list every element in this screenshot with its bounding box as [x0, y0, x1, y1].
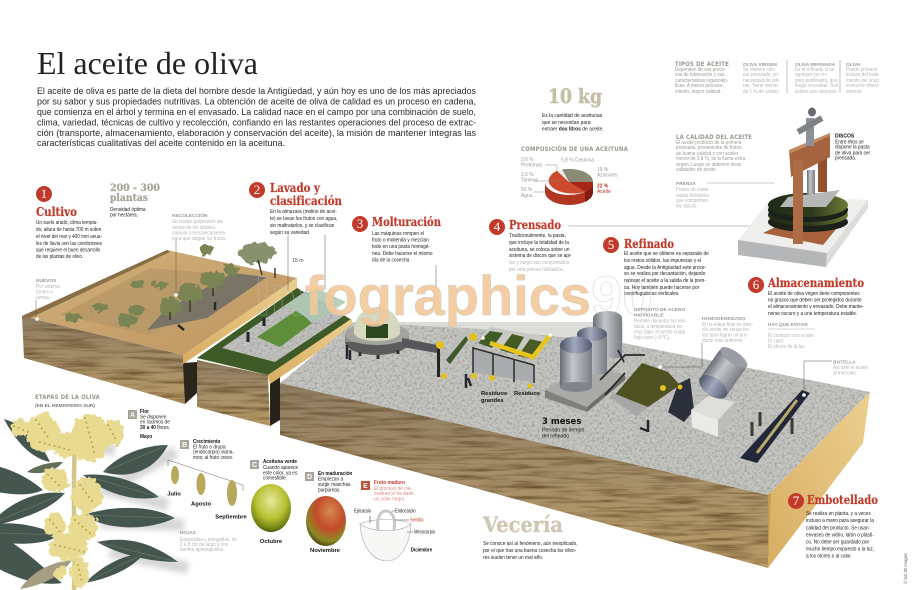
stage D: en maduración: D: [307, 474, 312, 481]
note: hay que evitar: HAY QUE EVITAR: [768, 322, 808, 328]
note: discos: dispone la pasta: [835, 144, 870, 151]
stage B: crecimiento: mos; al fruto crece.: [193, 455, 233, 461]
step 4: Prensado: Tradicionalmente, la pasta,: [509, 233, 566, 239]
panel: tipos de aceite: agregan (sin in-: [795, 72, 827, 78]
leaves: [0, 419, 178, 589]
stage C: aceituna verde: comestible.: [263, 475, 287, 482]
note: prensa: [676, 181, 775, 210]
chart: olive composition pie: Taninos: [521, 177, 538, 184]
stage B: crecimiento: Crecimiento: [193, 439, 221, 445]
panel: la calidad del aceite: calidades de aceite.: [676, 167, 717, 173]
step 4: Prensado: que incluye la totalidad de la: [509, 240, 569, 246]
panel: tipos de aceite: Dependen de sus proce-: [675, 67, 726, 73]
step 1: Cultivo: 1: [41, 186, 47, 201]
step 3: Molturación: [352, 214, 441, 264]
label: residuos: Residuos: [481, 391, 507, 397]
stage E: fruto maduro: El proceso de cal-: [374, 486, 412, 492]
step 2: Lavado y clasificación: [249, 180, 342, 236]
callout: 3 meses: Período de tiempo: [542, 428, 585, 434]
icon: steel tanks: [545, 311, 625, 412]
panel: tipos de aceite: miento, mayor calidad.: [675, 89, 722, 95]
stage C: aceituna verde: [250, 459, 298, 545]
panel: la calidad del aceite: El aceite producto de la primera: [676, 140, 742, 146]
step 3: Molturación: 3: [357, 216, 363, 231]
stage D: en maduración: En maduración: [318, 471, 352, 477]
step 5: Refinado: centrifugadoras verticales.: [624, 291, 679, 297]
icon: olive cross-section: [360, 511, 413, 561]
note: botella: BOTELLA: [833, 360, 856, 366]
stage E: fruto maduro: maduro lo ha dado: [374, 491, 414, 497]
chart: olive composition pie: COMPOSICIÓN DE UNA ACEITUNA: [521, 144, 628, 153]
step 5: Refinado: 5: [608, 237, 614, 252]
stage A: flor: Mayo: [140, 434, 153, 440]
chart: olive composition pie: Azúcares: [597, 172, 618, 179]
step 5: Refinado: El aceite que se obtiene es separado de: [624, 251, 709, 257]
label: residuos: [481, 391, 540, 404]
intro paragraph: por su sabor y sus propiedades nutritivas. La obtención de aceite de oliva de calidad es un proceso en cadena,: [37, 96, 476, 106]
panel: la calidad del aceite: prensada, proveniente de frutos: [676, 145, 742, 151]
title: El aceite de oliva: [37, 45, 258, 81]
stage D: en maduración: purpúreas.: [318, 487, 341, 494]
chart: olive composition pie: Aceite: [597, 189, 611, 195]
note: nuevos: brotes o: [36, 289, 53, 296]
step 5: Refinado: reposar el aceite a la salida de la pren-: [624, 278, 706, 284]
icon: wooden frame and screw: [789, 108, 830, 244]
note: hojas: 3 a 8 cm de largo y con: [180, 542, 228, 548]
panel: tipos de aceite: amente.: [846, 89, 863, 95]
step 5: Refinado: Refinado: [624, 236, 674, 251]
chart: olive composition pie: 3,6 %: [521, 172, 534, 178]
callout: Vecería: res suelen tener un mal año.: [483, 555, 543, 561]
note: depósito de acero: muy baja: el aceite cuaja: [634, 329, 685, 336]
step 7: Embotellado: Se realiza en planta, y a veces: [806, 511, 871, 517]
panel: la calidad del aceite: [676, 134, 752, 173]
intro paragraph: características cualitativas del aceite contenido en la aceituna.: [37, 137, 285, 148]
stat: 200-300 plantas: por hectárea.: [110, 212, 138, 219]
callout: 3 meses: del refinado: [542, 434, 569, 440]
note: homogeneizado: ducto más uniforme.: [702, 338, 744, 344]
heading: etapas de la oliva: (EN EL HEMISFERIO SUR): [35, 403, 95, 409]
panel: la calidad del aceite: menor de 0,8 %, se lo llama extra: [676, 156, 745, 162]
stage C: aceituna verde: Aceituna verde: [263, 459, 297, 465]
step 1: Cultivo: Un suelo arado, clima templa-: [36, 220, 98, 226]
step 2: Lavado y clasificación: 2: [254, 182, 260, 197]
step 3: Molturación: nea. Debe hacerse el mismo: [372, 251, 433, 257]
panel: tipos de aceite: OLIVA REFINADA: [795, 62, 836, 68]
stat: 200-300 plantas: plantas: [110, 193, 148, 204]
panel: tipos de aceite: nar. Tiene menos: [743, 83, 779, 89]
stage B: crecimiento: El fruto o drupa: [193, 444, 226, 451]
step 7: Embotellado: incluso a mano para asegurar la: [806, 518, 874, 524]
panel: tipos de aceite: por prensado, sin: [743, 72, 779, 78]
note: hay que evitar: El calor.: [768, 338, 785, 345]
step 2: Lavado y clasificación: te) se lavan los frutos con agua,: [270, 216, 337, 222]
panel: tipos de aceite: gerir purificado), que: [795, 78, 838, 84]
step 2: Lavado y clasificación: Lavado y: [270, 180, 321, 195]
note: hay que evitar: [768, 322, 815, 350]
intro paragraph: que comienza en el árbol y termina en el envasado. La calidad nace en el campo por una combinación de suelo,: [37, 106, 476, 117]
step 6: Almacenamiento: no grasos que deben ser protegidos durante: [768, 297, 862, 304]
step 7: Embotellado: co. No debe ser guardado por: [806, 539, 869, 546]
step 3: Molturación: Las máquinas rompen el: [372, 231, 424, 237]
panel: tipos de aceite: Se obtiene sólo: [743, 67, 775, 73]
step 5: Refinado: agua. Desde la Antigüedad este proce-: [624, 265, 706, 271]
stat: 10 kg: [542, 84, 604, 133]
note: recolección: RECOLECCIÓN: [172, 211, 208, 219]
stat: 200-300 plantas: [110, 183, 160, 219]
step 7: Embotellado: [788, 492, 878, 560]
step 1: Cultivo: que requiere el buen desarrollo: [36, 247, 100, 254]
intro paragraph: clima, variedad, técnicas de cultivo y recolección, confiando en las restantes operaciones del proceso de extrac-: [37, 116, 476, 128]
note: recolección: [172, 211, 227, 242]
step 3: Molturación: día de la cosecha.: [372, 257, 411, 264]
note: depósito de acero: INOXIDABLE: [634, 312, 664, 318]
note: depósito de acero: duos, a temperatura no: [634, 324, 682, 330]
note: homogeneizado: [702, 316, 753, 344]
note: recolección: manual o mecánicamente,: [172, 230, 226, 237]
stage B: crecimiento: B: [182, 442, 187, 449]
icon: workers: [248, 318, 264, 342]
stat: 200-300 plantas: 200 - 300: [110, 183, 160, 194]
note: homogeneizado: cla aceite de varias tor-: [702, 327, 750, 333]
step 1: Cultivo: [36, 186, 102, 260]
note: homogeneizado: HOMOGENEIZADO: [702, 316, 746, 322]
stage D: en maduración: Noviembre: [310, 548, 341, 554]
stage E: fruto maduro: Mesocarpio: [414, 529, 436, 535]
panel: tipos de aceite: características organolép-: [675, 78, 729, 84]
note: nuevos: NUEVOS: [36, 278, 57, 284]
note: depósito de acero: [634, 305, 687, 341]
step 1: Cultivo: les de lluvia son las condiciones: [36, 241, 102, 247]
panel: tipos de aceite: luego necesitan. Son: [795, 83, 838, 89]
icon: filter tray and tilted tank: [600, 343, 750, 437]
heading: etapas de la oliva: [35, 394, 100, 409]
chart: olive composition pie: Agua: [521, 193, 533, 199]
step 7: Embotellado: calidad del producto. Se usan: [806, 525, 869, 532]
panel: washing block 2: [197, 288, 355, 426]
panel: tipos de aceite: Es el refinado si se: [795, 67, 834, 73]
step 1: Cultivo: do, altura de hasta 700 m sobre: [36, 227, 102, 233]
note: depósito de acero: DEPÓSITO DE ACERO: [634, 305, 685, 313]
icon: yellow pipes and vats: [466, 327, 552, 388]
note: homogeneizado: En la etapa final se mez-: [702, 322, 753, 328]
stage A: flor: Flor: [140, 409, 149, 415]
step 1: Cultivo: Cultivo: [36, 204, 77, 219]
stat: 10 kg: 10 kg: [548, 84, 602, 108]
note: prensa: PRENSA: [676, 181, 697, 187]
stage C: aceituna verde: C: [252, 462, 257, 469]
label: residuos: grandes: [481, 398, 504, 404]
connector lines: 15 m: [292, 258, 304, 264]
flowers: [11, 414, 124, 587]
note: depósito de acero: bajo cero (−5 ºC).: [634, 335, 670, 341]
step 3: Molturación: Molturación: [372, 214, 441, 229]
panel: la calidad del aceite: de buena calidad y con acidez: [676, 151, 739, 157]
note: hay que evitar: El efecto de la luz.: [768, 344, 806, 350]
note: recolección: para que caigan los frutos.: [172, 236, 227, 242]
chart: olive composition pie: 3,6 %: [521, 157, 534, 163]
stage C: aceituna verde: este color, ya es: [263, 470, 298, 477]
icon: decanter ramp: [436, 328, 477, 379]
icon: stacked discs: [768, 190, 848, 232]
panel: tipos de aceite: ácidos sus menores.: [795, 89, 838, 95]
panel: tipos de aceite: sos de fabricación y sus: [675, 72, 725, 78]
intro paragraph: El aceite de oliva es parte de la dieta del hombre desde la Antigüedad, y aún hoy es uno de los más apreciados: [37, 85, 476, 96]
note: hojas: bordes aprietaguidos.: [180, 547, 225, 553]
step 6: Almacenamiento: Almacenamiento: [767, 275, 864, 290]
stage C: aceituna verde: Octubre: [260, 539, 283, 545]
stat: 10 kg: Es la cantidad de aceitunas: [542, 113, 602, 119]
step 6: Almacenamiento: 6: [753, 277, 760, 292]
note: homogeneizado: tas para lograr un pro-: [702, 332, 748, 339]
callout: Vecería: [482, 512, 578, 561]
step 7: Embotellado: a los olores o al calor.: [806, 553, 852, 560]
intro paragraph: ción (transporte, almacenamiento, elaboración y conservación del aceite), la misión de mantener íntegras las: [37, 127, 476, 138]
stage A: flor: [128, 409, 170, 440]
note: discos: Entre ellos se: [835, 139, 864, 146]
note: discos: prensada.: [835, 155, 856, 162]
stage B: crecimiento: Septiembre: [215, 514, 248, 520]
step 5: Refinado: sa. Hoy también puede hacerse por: [624, 285, 699, 291]
icon: olive trees: [65, 242, 275, 327]
stage D: en maduración: Empiezan a: [318, 476, 343, 483]
stage B: crecimiento: [167, 439, 248, 520]
step 4: Prensado: aceituna, se coloca sobre un: [509, 247, 570, 253]
panel: plant block 3: [280, 307, 870, 568]
stem: [74, 445, 75, 590]
illustration: olive branch: [0, 414, 188, 590]
stage B: crecimiento: Agosto: [191, 502, 211, 508]
step 5: Refinado: so se realiza por decantación, dejando: [624, 271, 705, 277]
stage E: fruto maduro: Endocarpio: [395, 508, 416, 514]
note: hay que evitar: El contacto con el aire.: [768, 333, 815, 339]
stage C: aceituna verde: Cuando aparece: [263, 465, 298, 471]
step 7: Embotellado: 7: [793, 493, 800, 508]
step 2: Lavado y clasificación: En la almazara (molino de acei-: [270, 209, 337, 215]
chart: olive composition pie: 5,8 % Celulosa: [561, 157, 594, 164]
connector lines: [35, 235, 832, 397]
shadow: [60, 440, 188, 568]
icon: young fruits: [171, 466, 237, 506]
panel: la calidad del aceite: virgen. Luego se obtienen otras: [676, 162, 741, 168]
panel: tipos de aceite: incluso del trata-: [846, 72, 880, 78]
label: residuos: Residuos: [514, 391, 540, 397]
illustration: olive press: [738, 108, 868, 267]
stage B: crecimiento: (endocarpio) viaria-: [193, 449, 234, 456]
step 6: Almacenamiento: [748, 275, 864, 317]
step 4: Prensado: Prensado: [509, 217, 561, 232]
step 6: Almacenamiento: el almacenamiento y envasado. Debe mante-: [768, 304, 864, 310]
note: hojas: HOJAS: [180, 530, 196, 535]
step 4: Prensado: [489, 217, 757, 273]
stat: 200-300 plantas: Densidad óptima: [110, 207, 146, 213]
step 4: Prensado: lan y luego son comprimidos: [509, 260, 570, 266]
stage E: fruto maduro: [354, 480, 436, 561]
stage E: fruto maduro: un color negro.: [374, 496, 406, 503]
icon: bottling line: [740, 390, 810, 463]
step 5: Refinado: [603, 236, 709, 297]
step 2: Lavado y clasificación: clasificación: [270, 193, 342, 208]
stage A: flor: en racimos de: [140, 419, 170, 426]
note: prensa: Posee un motor: [676, 187, 709, 193]
note: botella: [833, 360, 868, 377]
panel: field block 1, olive grove: [22, 242, 297, 404]
stage E: fruto maduro: Fruto maduro: [374, 480, 406, 486]
step 7: Embotellado: Embotellado: [807, 492, 878, 507]
note: nuevos: [36, 278, 61, 301]
stage D: en maduración: surgir manchas: [318, 482, 351, 488]
note: prensa: que comprimen: [676, 198, 708, 204]
stage E: fruto maduro: Diciembre: [411, 547, 432, 554]
note: prensa: varios hidráulico: [676, 193, 710, 199]
stage E: fruto maduro: Epicarpio: [354, 508, 371, 514]
icon: mill: [345, 307, 437, 360]
panel: tipos de aceite: de 1 % de acidez.: [743, 89, 780, 95]
stage E: fruto maduro: Semilla: [410, 517, 424, 523]
heading: etapas de la oliva: ETAPAS DE LA OLIVA: [35, 394, 100, 401]
note: discos: [835, 134, 870, 162]
chart: olive composition pie: 19 %: [597, 167, 608, 173]
note: hojas: Esparcidas y elongadas, de: [180, 537, 237, 543]
step 4: Prensado: por una prensa hidráulica.: [509, 267, 564, 273]
step 1: Cultivo: de las plantas de olivo.: [36, 254, 83, 260]
note: discos: de oliva para ser: [835, 150, 870, 157]
step 2: Lavado y clasificación: sin maltratarlos, y se clasifican: [270, 223, 334, 229]
note: depósito de acero: Permite decantar los resi-: [634, 318, 687, 325]
intro paragraph: [37, 85, 476, 148]
step 2: Lavado y clasificación: según su variedad.: [270, 230, 310, 236]
panel: la calidad del aceite: LA CALIDAD DEL ACEITE: [676, 134, 752, 141]
note: recolección: ramas de los árboles,: [172, 225, 216, 231]
note: nuevos: Por veteros,: [36, 284, 61, 290]
stage A: flor: Se disponen: [140, 414, 166, 421]
note: botella: al mercado.: [833, 370, 857, 377]
panel: tipos de aceite: ticas. A menor procesa-: [675, 83, 724, 89]
callout: 3 meses: [542, 417, 585, 440]
note: discos: DISCOS: [835, 134, 855, 140]
stage E: fruto maduro: E: [363, 483, 368, 490]
step 7: Embotellado: mucho tiempo expuesto a la luz,: [806, 546, 874, 553]
chart: olive composition pie: 22 %: [597, 183, 608, 190]
panel: tipos de aceite: evolución direct-: [846, 83, 880, 89]
watermark: Infographics90: [255, 264, 653, 327]
panel: tipos de aceite: TIPOS DE ACEITE: [675, 61, 729, 68]
stat: 10 kg: que se necesitan para: [542, 120, 590, 126]
panel: tipos de aceite: OLIVA VIRGEN: [743, 62, 777, 68]
callout: Vecería: por el que tras una buena cosecha los olivo-: [483, 548, 576, 554]
step 5: Refinado: los restos sólidos, las impurezas y el: [624, 258, 701, 264]
stage A: flor: A: [130, 412, 135, 419]
stage A: flor: 30 a 40 flores.: [140, 425, 170, 431]
note: botella: Así sale el aceite: [833, 365, 868, 371]
step 3: Molturación: todo en una pasta homogé-: [372, 244, 430, 250]
copyright: © Sol 90 Images: [903, 553, 908, 584]
panel: tipos de aceite: necesidad de refi-: [743, 78, 780, 84]
chart: olive composition pie: Proteínas: [521, 162, 542, 169]
step 6: Almacenamiento: El aceite de oliva virgen tiene componentes: [768, 291, 860, 297]
note: hojas: [180, 530, 237, 553]
panel: tipos de aceite: OLIVA: [846, 62, 861, 68]
chart: olive composition pie: [521, 144, 628, 205]
note: nuevos: ramas.: [36, 295, 50, 301]
chart: olive composition pie: 50 %: [521, 187, 532, 193]
stat: 10 kg: extraer dos litros de aceite.: [542, 126, 604, 133]
panel: tipos de aceite: Puede provenir: [846, 67, 878, 73]
step 6: Almacenamiento: nerse oscuro y a una temperatura estable.: [768, 311, 857, 317]
step 4: Prensado: sistema de discos que se api-: [509, 253, 572, 259]
note: recolección: Se realiza golpeando las: [172, 219, 223, 225]
step 3: Molturación: fruto o molienda y mezclan: [372, 237, 429, 244]
panel: tipos de aceite: miento del orujo: [846, 78, 879, 84]
callout: 3 meses: 3 meses: [542, 417, 581, 427]
callout: Vecería: Se conoce así al fenómeno, aún inexplicado,: [483, 541, 578, 547]
note: prensa: los discos.: [676, 203, 698, 210]
callout: Vecería: Vecería: [482, 512, 563, 537]
stage B: crecimiento: Julio: [167, 492, 181, 498]
step 4: Prensado: 4: [494, 219, 501, 234]
step 7: Embotellado: envases de vidrio, latón o plásti-: [806, 532, 874, 539]
panel: tipos de aceite: [675, 60, 880, 95]
stage D: en maduración: [305, 471, 352, 554]
step 1: Cultivo: el nivel del mar y 400 mm anua-: [36, 234, 102, 240]
